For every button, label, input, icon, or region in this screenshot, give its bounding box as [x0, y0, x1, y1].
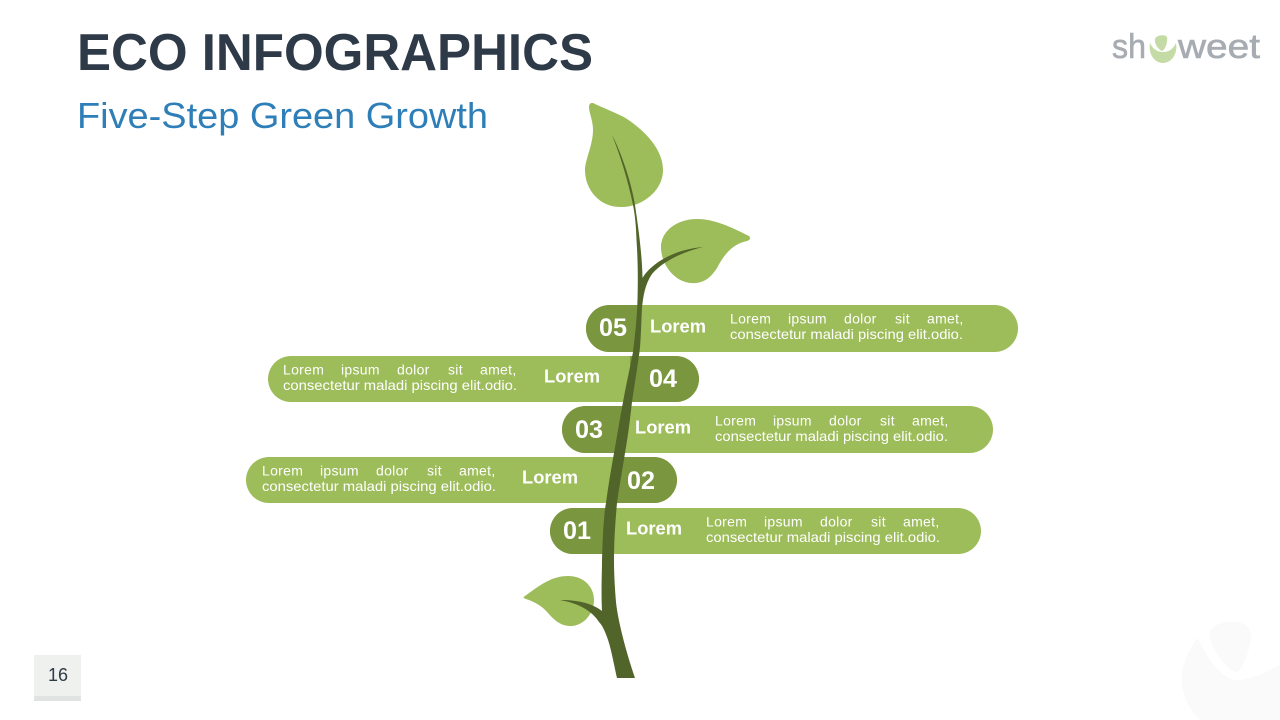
step 04 bar: 04	[649, 365, 677, 393]
step 01 bar: Lorem	[626, 518, 682, 538]
step 04 bar: Lorem	[544, 366, 600, 386]
plant stem with branches	[560, 135, 703, 678]
step 02 bar: amet,	[459, 462, 496, 478]
step 05 bar: 05	[599, 314, 627, 342]
step 01 bar	[550, 508, 981, 554]
step 03 bar: amet,	[912, 412, 949, 428]
step 04 bar: sit	[448, 362, 463, 378]
step 02 bar: sit	[427, 462, 442, 478]
step 01 bar: dolor	[820, 514, 853, 530]
step 05 bar: consectetur maladi piscing elit.odio.	[730, 326, 963, 342]
step 01 bar: Lorem	[706, 514, 747, 530]
subtitle: Five-Step Green Growth	[77, 95, 488, 136]
step 03 bar: 03	[575, 416, 603, 444]
step 04 bar: amet,	[480, 362, 517, 378]
step 02 bar: 02	[627, 467, 655, 495]
step 02 bar: Lorem	[522, 466, 578, 488]
brand logo: weet	[1177, 28, 1261, 66]
step 03 bar: Lorem	[715, 412, 756, 428]
brand logo	[1112, 28, 1261, 66]
page number badge: 16	[48, 665, 68, 685]
step 01 bar: ipsum	[764, 514, 803, 530]
step 03 bar: ipsum	[773, 412, 812, 428]
step 03 bar: Lorem	[635, 416, 691, 438]
step 03 bar	[562, 406, 993, 453]
step 04 bar: ipsum	[341, 362, 380, 378]
step 02 bar	[246, 457, 677, 503]
step 05 bar: dolor	[844, 310, 877, 326]
step 03 bar: dolor	[829, 412, 862, 428]
step 01 bar: sit	[871, 514, 886, 530]
step 04 bar: consectetur maladi piscing elit.odio.	[283, 377, 517, 393]
step 01 bar: amet,	[903, 514, 940, 530]
step 05 bar: sit	[895, 310, 910, 326]
step 05 bar: Lorem	[730, 310, 771, 326]
step 03 bar: sit	[880, 412, 895, 428]
step 05 bar: ipsum	[788, 310, 827, 326]
step 02 bar: dolor	[376, 462, 409, 478]
watermark logo	[1182, 622, 1280, 720]
step 01 bar: 01	[563, 517, 591, 545]
leaf: top	[585, 103, 663, 207]
step 01 bar: consectetur maladi piscing elit.odio.	[706, 529, 940, 545]
step 05 bar: amet,	[927, 310, 964, 326]
step 02 bar: ipsum	[320, 462, 359, 478]
step 02 bar: Lorem	[262, 462, 303, 478]
leaf: upper right	[661, 219, 750, 283]
step 04 bar: Lorem	[283, 362, 324, 378]
leaf: bottom	[524, 576, 594, 626]
step 02 bar: consectetur maladi piscing elit.odio.	[262, 478, 496, 494]
title: ECO INFOGRAPHICS	[77, 24, 593, 82]
step 05 bar	[586, 305, 1018, 352]
page number badge	[34, 655, 81, 701]
step 04 bar: dolor	[397, 362, 430, 378]
step 03 bar: consectetur maladi piscing elit.odio.	[715, 428, 948, 444]
step 04 bar	[268, 356, 699, 402]
step 05 bar: Lorem	[650, 316, 706, 336]
brand logo: sh	[1112, 28, 1146, 66]
